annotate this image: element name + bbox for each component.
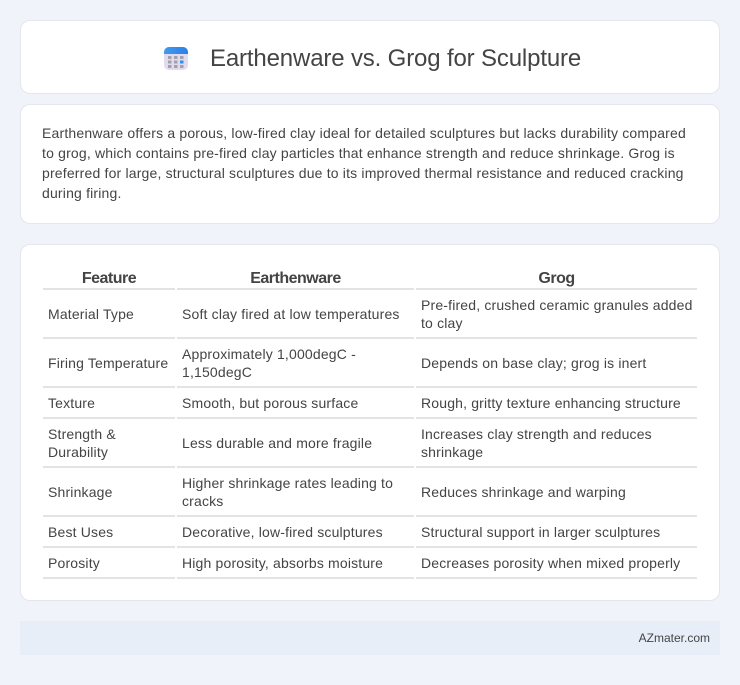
cell: Reduces shrinkage and warping	[421, 484, 626, 500]
row: Firing Temperature: Firing Temperature	[48, 355, 168, 371]
cell: shrinkage	[421, 444, 483, 460]
row: Strength & Durability	[48, 426, 116, 460]
cell	[421, 426, 652, 460]
table header: Grog: Grog	[538, 270, 575, 287]
cell: Higher shrinkage rates leading to	[182, 475, 393, 491]
text block: summary: preferred for large, structural sculptures due to its improved thermal resistance and reduced cracking	[42, 165, 684, 181]
row: Porosity: Porosity	[48, 555, 100, 571]
text block: summary	[42, 125, 686, 201]
cell: Increases clay strength and reduces	[421, 426, 652, 442]
row: Best Uses: Best Uses	[48, 524, 113, 540]
panel: comparison table	[20, 244, 720, 601]
row: Strength & Durability: Durability	[48, 444, 108, 460]
cell: Structural support in larger sculptures	[421, 524, 660, 540]
cell: Smooth, but porous surface	[182, 395, 358, 411]
cell: Decreases porosity when mixed properly	[421, 555, 680, 571]
cell: Approximately 1,000degC -	[182, 346, 356, 362]
cell: High porosity, absorbs moisture	[182, 555, 383, 571]
row: Strength & Durability: Strength &	[48, 426, 116, 442]
table header: Earthenware: Earthenware	[250, 270, 341, 287]
cell: Less durable and more fragile	[182, 435, 372, 451]
row: Texture: Texture	[48, 395, 95, 411]
footer bar	[20, 621, 720, 655]
cell	[182, 475, 393, 509]
panel: summary	[20, 104, 720, 224]
icon: calendar	[164, 47, 188, 70]
cell: Decorative, low-fired sculptures	[182, 524, 383, 540]
cell: Rough, gritty texture enhancing structure	[421, 395, 681, 411]
row: Material Type: Material Type	[48, 306, 134, 322]
text block: summary: to grog, which contains pre-fired clay particles that enhance strength and reduce shrinkage. Grog is	[42, 145, 675, 161]
table header: Feature: Feature	[82, 270, 136, 287]
cell: Soft clay fired at low temperatures	[182, 306, 400, 322]
text block: summary: Earthenware offers a porous, low-fired clay ideal for detailed sculptures but lacks durability compared	[42, 125, 686, 141]
cell: Depends on base clay; grog is inert	[421, 355, 646, 371]
cell	[421, 297, 693, 331]
footer text: AZmater.com	[639, 631, 710, 645]
cell: cracks	[182, 493, 223, 509]
cell	[182, 346, 356, 380]
panel: title card	[20, 20, 720, 94]
cell: to clay	[421, 315, 463, 331]
cell: 1,150degC	[182, 364, 252, 380]
text block: summary: during firing.	[42, 185, 122, 201]
title: Earthenware vs. Grog for Sculpture	[210, 45, 581, 72]
row: Shrinkage: Shrinkage	[48, 484, 113, 500]
cell: Pre-fired, crushed ceramic granules added	[421, 297, 693, 313]
